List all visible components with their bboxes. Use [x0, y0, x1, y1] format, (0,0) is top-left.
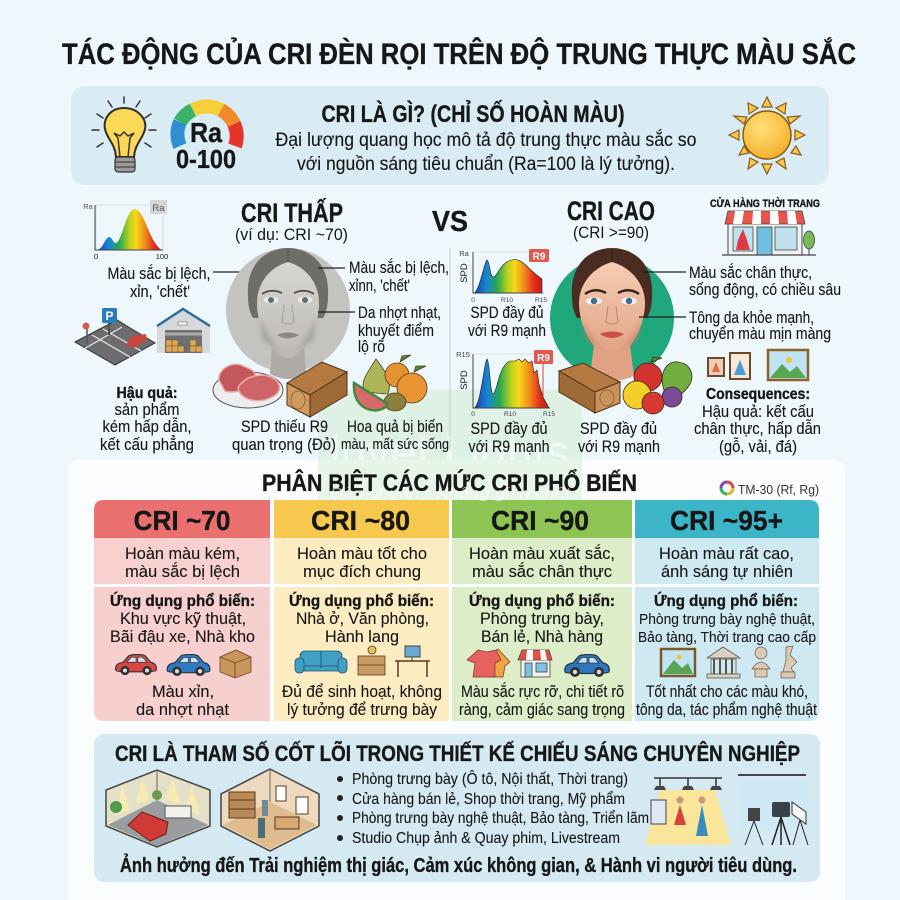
text: high CRI consequences — [694, 386, 821, 456]
icon: Ra gauge: Ra — [190, 117, 222, 148]
icon: wood block — [287, 362, 347, 417]
column: CRI 95+ — [635, 500, 819, 721]
icon: fashion store — [710, 197, 820, 255]
icon: dresser with lamp — [358, 646, 385, 675]
bullet list: applications: Phòng trưng bày (Ô tô, Nội thất, Thời trang) — [352, 771, 628, 788]
icon: picture frames — [708, 350, 808, 380]
low CRI callout: left: xỉn, 'chết' — [130, 283, 190, 301]
icon: photo studio — [738, 775, 808, 845]
text: high CRI consequences: Hậu quả: kết cấu — [702, 403, 814, 421]
divider — [449, 248, 451, 450]
caption: high CRI spectrum — [578, 420, 660, 456]
watermark — [318, 390, 582, 500]
high CRI callout: skin: Tông da khỏe mạnh, — [689, 309, 814, 327]
low CRI callout: skin: lộ rõ — [358, 338, 385, 356]
chart: full SPD with R9 (top): R10 — [501, 297, 513, 304]
chart: low CRI spectrum: Ra — [83, 202, 94, 211]
icon: red car — [116, 654, 156, 675]
text: high CRI consequences: (gỗ, vải, đá) — [719, 437, 797, 456]
chart: low CRI spectrum: 0 — [94, 252, 98, 261]
caption: top chart: SPD đầy đủ — [470, 304, 544, 322]
column: CRI 80: Nhà ở, Văn phòng, — [296, 610, 429, 628]
icon: light bulb — [92, 97, 156, 172]
text: high CRI consequences: chân thực, hấp dẫn — [694, 419, 821, 438]
high CRI callout: skin — [639, 309, 831, 343]
caption: top chart — [468, 304, 546, 340]
column: CRI 90 — [452, 500, 632, 721]
icon: bust — [752, 647, 770, 677]
text: low CRI consequences: sản phẩm — [114, 401, 180, 419]
icon: Ra gauge: 0-100 — [176, 144, 236, 174]
icon: gallery stage — [645, 778, 731, 845]
heading: high CRI — [567, 196, 655, 242]
caption: bottom chart — [468, 420, 550, 456]
heading: low CRI — [235, 197, 348, 244]
icon: cardboard box — [220, 650, 251, 678]
icon: car showroom — [106, 770, 210, 847]
heading: what is CRI: CRI LÀ GÌ? (CHỈ SỐ HOÀN MÀU) — [322, 99, 624, 128]
column: CRI 70: màu sắc bị lệch — [125, 562, 240, 581]
bullet list: applications: Studio Chụp ảnh & Quay phim, Livestream — [352, 830, 620, 847]
caption: high CRI spectrum: SPD đầy đủ — [580, 420, 657, 438]
icon: painting — [661, 649, 695, 676]
column: CRI 80: Hành lang — [325, 628, 399, 646]
caption: top chart: với R9 mạnh — [468, 322, 546, 340]
icon: blue car — [167, 654, 210, 676]
column: CRI 95+: tông da, tác phẩm nghệ thuật — [636, 701, 817, 719]
column: CRI 95+: Ứng dụng phổ biến: — [654, 592, 798, 610]
icon: fashion store: CỬA HÀNG THỜI TRANG — [710, 197, 820, 210]
icon: sofa — [295, 651, 347, 673]
caption: faded fruit: Hoa quả bị biến — [347, 418, 443, 436]
column: CRI 90: màu sắc chân thực — [472, 562, 612, 581]
column: CRI 95+: Tốt nhất cho các màu khó, — [646, 683, 808, 701]
VS label: VS — [432, 206, 468, 238]
column: CRI 80: Hoàn màu tốt cho — [297, 545, 427, 563]
text: low CRI consequences: kết cấu phẳng — [100, 435, 194, 454]
text: CRI definition — [276, 129, 696, 175]
icon: parking lot — [75, 308, 155, 365]
watermark: luvet Lights — [330, 426, 570, 478]
caption: faded fruit: màu, mất sức sống — [341, 437, 449, 453]
icon: parking lot: P — [105, 309, 114, 323]
bullet list: applications: Cửa hàng bán lẻ, Shop thời trang, Mỹ phẩm — [352, 791, 625, 808]
column: CRI 90: Màu sắc rực rỡ, chi tiết rõ — [461, 682, 624, 701]
column: CRI 95+: ánh sáng tự nhiên — [661, 563, 793, 581]
icon: shirts — [467, 649, 510, 677]
text: low CRI consequences — [100, 385, 194, 454]
high CRI callout: colour: Màu sắc chân thực, — [689, 263, 812, 282]
text: CRI definition: với nguồn sáng tiêu chuẩn (Ra=100 là lý tưởng). — [297, 154, 675, 175]
icon: statue — [781, 646, 797, 678]
chart: low CRI spectrum — [83, 200, 168, 261]
text: low CRI consequences: kém hấp dẫn, — [102, 417, 192, 436]
chart: full SPD with R9 (bottom): R9 — [537, 353, 550, 364]
caption: high CRI spectrum: với R9 mạnh — [578, 438, 660, 456]
icon: retail shop — [221, 769, 319, 851]
low CRI callout: top right: Màu sắc bị lệch, — [349, 258, 449, 277]
chart: full SPD with R9 (top): SPD — [459, 263, 470, 283]
chart: full SPD with R9 (top): 0 — [471, 297, 475, 304]
text: low CRI consequences: Hậu quả: — [116, 385, 178, 402]
caption: bottom chart: SPD đầy đủ — [470, 420, 548, 438]
chart: full SPD with R9 (bottom): SPD — [459, 370, 470, 390]
icon: sun — [729, 97, 805, 174]
caption: faded fruit — [341, 418, 449, 453]
heading: low CRI: (ví dụ: CRI ~70) — [235, 225, 348, 244]
column: CRI 70: Khu vực kỹ thuật, — [120, 610, 246, 628]
heading: core parameter: CRI LÀ THAM SỐ CỐT LÕI TRONG THIẾT KẾ CHIẾU SÁNG CHUYÊN NGHIỆP — [115, 740, 800, 766]
icon: steak — [213, 364, 283, 408]
column: CRI 95+: Hoàn màu rất cao, — [659, 545, 794, 563]
heading: low CRI: CRI THẤP — [241, 197, 343, 228]
low CRI callout: top right: xỉnn, 'chết' — [349, 277, 410, 295]
watermark overlap — [318, 460, 582, 500]
low CRI callout: left: Màu sắc bị lệch, — [108, 264, 210, 283]
column: CRI 95+: Phòng trưng bày nghệ thuật, — [639, 611, 815, 628]
caption: bottom chart: với R9 mạnh — [468, 438, 550, 456]
column: CRI 90: Bán lẻ, Nhà hàng — [481, 628, 603, 646]
column: CRI 90: Hoàn màu xuất sắc, — [469, 544, 615, 563]
column: CRI 70: Hoàn màu kém, — [125, 545, 240, 563]
low CRI callout: top right — [318, 258, 449, 295]
chart: full SPD with R9 (bottom): 0 — [471, 411, 475, 418]
column: CRI 80: mục đích chung — [303, 563, 421, 581]
chart: full SPD with R9 (bottom): R10 — [504, 411, 516, 418]
portrait: low CRI face — [226, 248, 350, 379]
icon: desk with monitor — [395, 646, 430, 677]
icon: store — [518, 650, 552, 677]
chart: full SPD with R9 (top): R9 — [533, 252, 546, 262]
icon: fresh fruit — [623, 357, 692, 414]
low CRI callout: left — [108, 264, 244, 301]
bullet list: applications: Phòng trưng bày nghệ thuật, Bảo tàng, Triển lãm — [352, 810, 649, 827]
column: CRI 80: CRI ~80 — [311, 505, 410, 536]
column: CRI 70: Ứng dụng phổ biến: — [110, 592, 255, 610]
chart: full SPD with R9 (top): R15 — [535, 297, 547, 304]
bullet list: applications — [337, 771, 649, 847]
chart: full SPD with R9 (bottom): R15 — [543, 411, 555, 418]
column: CRI 95+: CRI ~95+ — [670, 505, 783, 536]
panel: what is CRI — [71, 86, 829, 185]
high CRI callout: colour — [642, 263, 841, 299]
TM-30 note: TM-30 (Rf, Rg) — [738, 482, 819, 497]
heading: high CRI: (CRI >=90) — [573, 223, 649, 242]
low CRI callout: skin: khuyết điểm — [358, 322, 434, 340]
column: CRI 95+: Bảo tàng, Thời trang cao cấp — [638, 629, 816, 646]
column: CRI 70: Màu xỉn, — [152, 683, 214, 701]
chart: low CRI spectrum: Ra — [152, 203, 165, 214]
chart: full SPD with R9 (top): Ra — [459, 249, 470, 258]
column: CRI 70: Bãi đậu xe, Nhà kho — [110, 628, 255, 646]
heading: CRI levels: PHÂN BIỆT CÁC MỨC CRI PHỔ BIẾN — [262, 469, 637, 497]
text: high CRI consequences: Consequences: — [706, 386, 810, 403]
column: CRI 70: da nhợt nhạt — [136, 701, 229, 719]
text: CRI definition: Đại lượng quang học mô tả độ trung thực màu sắc so — [276, 129, 696, 151]
heading: high CRI: CRI CAO — [567, 196, 655, 226]
icon: wood block high CRI — [559, 363, 620, 413]
icon: blue car — [565, 654, 609, 677]
column: CRI 90: CRI ~90 — [491, 505, 589, 536]
portrait: high CRI face — [550, 248, 674, 381]
chart: full SPD with R9 (bottom) — [456, 350, 555, 418]
column: CRI 80: Ứng dụng phổ biến: — [289, 592, 434, 610]
icon: museum — [707, 647, 740, 678]
panel: professional lighting — [94, 734, 820, 882]
chart: full SPD with R9 (bottom): R15 — [456, 350, 470, 359]
column: CRI 90: ràng, cảm giác sang trọng — [459, 701, 625, 719]
icon: faded fruit — [354, 355, 427, 411]
column: CRI 70: CRI ~70 — [134, 505, 230, 536]
column: CRI 70 — [94, 500, 270, 721]
high CRI callout: skin: chuyển màu mịn màng — [689, 325, 831, 343]
column: CRI 80: lý tưởng để trưng bày — [287, 701, 438, 719]
low CRI callout: skin: Da nhợt nhạt, — [358, 304, 441, 322]
low CRI callout: skin — [318, 304, 441, 356]
watermark tagline: Đèn chuẩn - Không gian chất — [330, 485, 571, 502]
caption: SPD lacks R9: SPD thiếu R9 — [241, 418, 328, 436]
column: CRI 90: Ứng dụng phổ biến: — [469, 592, 615, 610]
high CRI callout: colour: sống động, có chiều sâu — [689, 281, 841, 299]
chart: full SPD with R9 (top) — [459, 249, 549, 304]
icon: warehouse — [157, 309, 210, 353]
column: CRI 80 — [274, 500, 449, 721]
caption: SPD lacks R9 — [232, 418, 336, 454]
chart: low CRI spectrum: 100 — [156, 252, 168, 261]
panel: lower white section — [68, 460, 845, 900]
column: CRI 90: Phòng trưng bày, — [480, 610, 604, 628]
column: CRI 80: Đủ để sinh hoạt, không — [282, 683, 442, 701]
caption: SPD lacks R9: quan trọng (Đỏ) — [232, 436, 336, 454]
icon: Ra gauge — [176, 106, 237, 174]
